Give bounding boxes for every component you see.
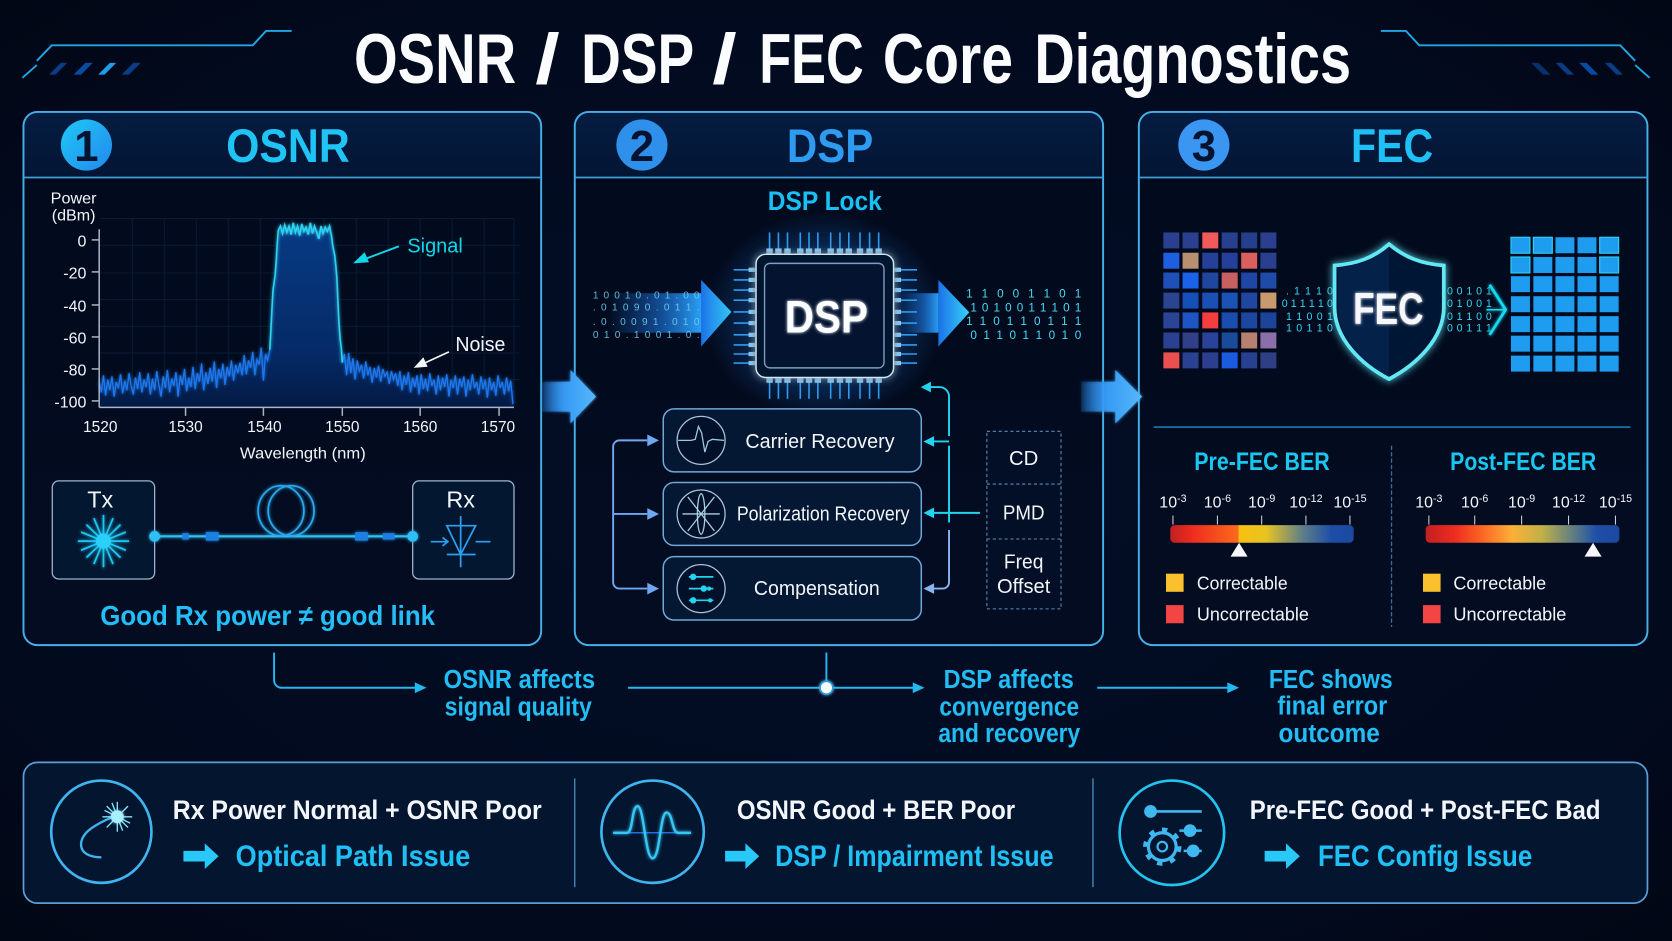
signal callout bbox=[353, 236, 463, 263]
number badge 1 bbox=[61, 119, 112, 171]
DSP chip bbox=[705, 211, 944, 420]
pre-FEC BER scale: 10 bbox=[1289, 495, 1307, 512]
heading: OSNR: OSNR bbox=[226, 120, 350, 172]
impairments dashed box: Offset bbox=[997, 576, 1051, 598]
heading: FEC: FEC bbox=[1351, 120, 1433, 172]
flow: DSP affects convergence and recovery: convergence bbox=[939, 693, 1079, 721]
feedback arrows bbox=[921, 382, 980, 594]
y axis labels: -100 bbox=[54, 394, 87, 411]
pre-FEC BER scale: Correctable bbox=[1197, 574, 1288, 594]
icon: laser star bbox=[78, 515, 129, 567]
title: / bbox=[535, 19, 560, 98]
pre-FEC BER scale: Pre-FEC BER bbox=[1194, 449, 1330, 476]
title: FEC bbox=[759, 19, 864, 98]
pre-FEC BER scale: 10 bbox=[1204, 495, 1222, 512]
title bbox=[354, 19, 1351, 98]
title: Diagnostics bbox=[1034, 19, 1351, 98]
post-FEC BER scale: -12 bbox=[1570, 493, 1585, 505]
post-FEC BER scale: -3 bbox=[1433, 493, 1443, 505]
post-FEC BER scale: 10 bbox=[1599, 495, 1617, 512]
input data stream arrow: 0 1 0 . 1 0 0 1 . 0 . bbox=[593, 330, 700, 341]
x axis labels bbox=[83, 419, 515, 463]
panel: FEC bbox=[1139, 112, 1647, 645]
y axis labels: -40 bbox=[63, 298, 87, 315]
y axis labels: -80 bbox=[63, 362, 87, 379]
box: carrier recovery bbox=[663, 409, 921, 472]
post-FEC BER scale: Uncorrectable bbox=[1453, 605, 1566, 625]
flow: DSP affects convergence and recovery: and recovery bbox=[938, 720, 1081, 748]
binary stream into shield: 0 1 1 1 1 0 bbox=[1282, 298, 1333, 310]
arrow bbox=[183, 843, 219, 869]
Rx box: Rx bbox=[446, 487, 475, 513]
post-FEC BER scale: 10 bbox=[1552, 495, 1570, 512]
flow: FEC shows final error outcome: FEC shows bbox=[1269, 666, 1393, 694]
post-FEC BER scale: 10 bbox=[1461, 495, 1479, 512]
diagnosis: DSP impairment issue: OSNR Good + BER Poor bbox=[737, 795, 1015, 825]
pre-FEC BER scale: -15 bbox=[1351, 493, 1367, 505]
diagnosis: optical path issue bbox=[51, 781, 542, 883]
binary stream into shield: . 1 1 1 0 bbox=[1286, 285, 1333, 297]
post-FEC BER scale: -15 bbox=[1617, 493, 1632, 505]
output data stream arrow bbox=[902, 280, 1082, 347]
number badge 2: 2 bbox=[630, 122, 654, 171]
title: OSNR bbox=[354, 19, 516, 98]
icon: fiber with spark bbox=[51, 781, 151, 883]
diagnosis: optical path issue: Optical Path Issue bbox=[236, 840, 470, 873]
icon: pulse wave bbox=[601, 781, 704, 883]
y axis labels: (dBm) bbox=[52, 208, 95, 225]
flow: FEC shows final error outcome bbox=[1097, 666, 1393, 748]
x axis labels: 1550 bbox=[325, 419, 360, 436]
caption: good Rx power: Good Rx power ≠ good link bbox=[100, 600, 436, 631]
diagnosis: FEC config issue: Pre-FEC Good + Post-FEC Bad bbox=[1250, 795, 1601, 825]
signal callout: Signal bbox=[407, 236, 463, 258]
post-FEC BER scale: Correctable bbox=[1453, 574, 1546, 594]
post-FEC BER scale bbox=[1415, 449, 1632, 625]
x axis labels: 1560 bbox=[403, 419, 437, 436]
spectrum chart bbox=[51, 191, 519, 463]
y axis labels: 0 bbox=[78, 233, 87, 250]
diagnosis: optical path issue: Rx Power Normal + OSNR Poor bbox=[173, 795, 542, 825]
binary stream into shield: 1 0 1 1 0 bbox=[1286, 323, 1333, 335]
binary stream into shield: 1 1 0 0 1 bbox=[1286, 311, 1333, 323]
pre-FEC BER scale: -6 bbox=[1222, 493, 1231, 505]
title: / bbox=[712, 19, 737, 98]
icon: sliders bbox=[677, 565, 725, 613]
DSP chip: DSP bbox=[785, 291, 868, 343]
x axis labels: 1520 bbox=[83, 419, 117, 436]
diagnosis: FEC config issue bbox=[1120, 781, 1601, 885]
pre-FEC BER scale: -9 bbox=[1266, 493, 1275, 505]
Tx box: Tx bbox=[87, 487, 114, 513]
post-FEC BER scale: 10 bbox=[1415, 495, 1433, 512]
impairments dashed box: CD bbox=[1009, 448, 1038, 470]
binary stream out of shield: 0 1 0 0 1 bbox=[1447, 298, 1492, 310]
pre-FEC BER scale: -12 bbox=[1307, 493, 1323, 505]
diagnosis: DSP impairment issue bbox=[601, 781, 1054, 883]
decoration: top left circuit lines bbox=[22, 31, 292, 78]
panel: OSNR bbox=[23, 112, 541, 645]
x axis labels: 1570 bbox=[481, 419, 515, 436]
input data stream arrow: 1 0 0 1 0 . 0 1 . 0 0 bbox=[593, 291, 700, 302]
diagnosis: FEC config issue: FEC Config Issue bbox=[1318, 840, 1532, 873]
title: Core bbox=[883, 19, 1013, 98]
input bracket arrows bbox=[613, 435, 659, 594]
flow: DSP affects convergence and recovery bbox=[628, 653, 1081, 748]
flow: OSNR affects signal quality: signal quality bbox=[445, 693, 593, 721]
panel: DSP bbox=[575, 112, 1103, 645]
number badge 3: 3 bbox=[1192, 122, 1216, 171]
error block grid bbox=[1163, 232, 1276, 368]
y axis labels: Power bbox=[51, 191, 97, 208]
impairments dashed box: Freq bbox=[1004, 551, 1043, 573]
binary stream into shield bbox=[1282, 285, 1333, 335]
icon: polarization bbox=[677, 490, 725, 538]
box: compensation: Compensation bbox=[754, 578, 880, 600]
pre-FEC BER scale: 10 bbox=[1248, 495, 1266, 512]
box: polarization recovery: Polarization Recovery bbox=[737, 503, 910, 525]
input data stream arrow bbox=[593, 280, 732, 347]
output data stream arrow: 0 1 1 0 1 1 0 1 0 bbox=[970, 329, 1082, 342]
post-FEC BER scale: -9 bbox=[1526, 493, 1535, 505]
icon: photodiode bbox=[431, 516, 491, 567]
noise callout: Noise bbox=[455, 334, 505, 356]
title: DSP bbox=[581, 19, 694, 98]
impairments dashed box bbox=[987, 431, 1061, 609]
flow: DSP affects convergence and recovery: DSP affects bbox=[944, 666, 1074, 694]
flow: FEC shows final error outcome: final error bbox=[1277, 692, 1387, 720]
icon: waveform bbox=[677, 416, 725, 464]
y axis labels: -60 bbox=[63, 330, 87, 347]
pre-FEC BER scale bbox=[1159, 449, 1367, 625]
chart axes bbox=[92, 229, 514, 416]
panel: diagnosis summary bbox=[23, 762, 1647, 903]
output data stream arrow: 1 0 1 0 0 1 1 1 0 1 bbox=[970, 301, 1081, 314]
noise callout bbox=[414, 334, 505, 368]
flow: OSNR affects signal quality bbox=[274, 653, 595, 721]
impairments dashed box: PMD bbox=[1003, 502, 1044, 524]
Tx box bbox=[52, 481, 155, 579]
number badge 1: 1 bbox=[74, 122, 99, 171]
decoration: top right circuit lines bbox=[1381, 31, 1650, 78]
Rx box bbox=[413, 481, 514, 579]
post-FEC BER scale: 10 bbox=[1508, 495, 1526, 512]
box: polarization recovery bbox=[663, 482, 921, 545]
flow: FEC shows final error outcome: outcome bbox=[1279, 720, 1380, 748]
FEC shield: FEC bbox=[1353, 284, 1424, 334]
input data stream arrow: . 0 . 0 0 9 1 . 0 1 0 bbox=[593, 317, 700, 328]
number badge 2 bbox=[616, 119, 668, 171]
pre-FEC BER scale: Uncorrectable bbox=[1197, 605, 1309, 625]
pre-FEC BER scale: 10 bbox=[1333, 495, 1351, 512]
chevron arrow bbox=[1486, 285, 1506, 335]
binary stream out of shield bbox=[1447, 285, 1492, 335]
output data stream arrow: 1 1 0 0 1 1 0 1 bbox=[966, 287, 1081, 300]
binary stream out of shield: 0 1 1 0 0 bbox=[1447, 311, 1492, 323]
post-FEC BER scale: -6 bbox=[1479, 493, 1488, 505]
diagnosis: DSP impairment issue: DSP / Impairment Issue bbox=[775, 840, 1054, 873]
arrow: DSP to FEC bbox=[1081, 370, 1142, 423]
label: DSP lock: DSP Lock bbox=[768, 186, 882, 216]
box: compensation bbox=[663, 557, 921, 620]
arrow bbox=[725, 843, 759, 869]
binary stream out of shield: 0 0 1 1 1 bbox=[1447, 323, 1492, 335]
icon: gear and sliders bbox=[1120, 781, 1224, 885]
pre-FEC BER scale: 10 bbox=[1159, 495, 1177, 512]
post-FEC BER scale: Post-FEC BER bbox=[1450, 449, 1597, 476]
arrow: OSNR to DSP bbox=[542, 370, 596, 423]
y axis labels bbox=[51, 191, 97, 411]
y axis labels: -20 bbox=[63, 265, 87, 282]
FEC shield bbox=[1335, 244, 1444, 379]
output data stream arrow: 1 1 0 1 1 0 1 1 1 bbox=[966, 315, 1081, 328]
box: carrier recovery: Carrier Recovery bbox=[745, 431, 895, 453]
x axis labels: 1530 bbox=[168, 419, 203, 436]
pre-FEC BER scale: -3 bbox=[1177, 493, 1187, 505]
heading: DSP: DSP bbox=[787, 120, 873, 172]
flow: OSNR affects signal quality: OSNR affects bbox=[444, 666, 595, 694]
x axis labels: 1540 bbox=[247, 419, 282, 436]
binary stream out of shield: 0 0 1 0 1 bbox=[1447, 285, 1492, 297]
x axis labels: Wavelength (nm) bbox=[240, 446, 366, 463]
corrected block grid bbox=[1511, 237, 1619, 372]
arrow bbox=[1265, 843, 1300, 869]
input data stream arrow: . 0 1 0 9 0 . 0 1 1 . bbox=[593, 302, 700, 313]
number badge 3 bbox=[1178, 119, 1229, 171]
fiber link bbox=[149, 486, 418, 542]
